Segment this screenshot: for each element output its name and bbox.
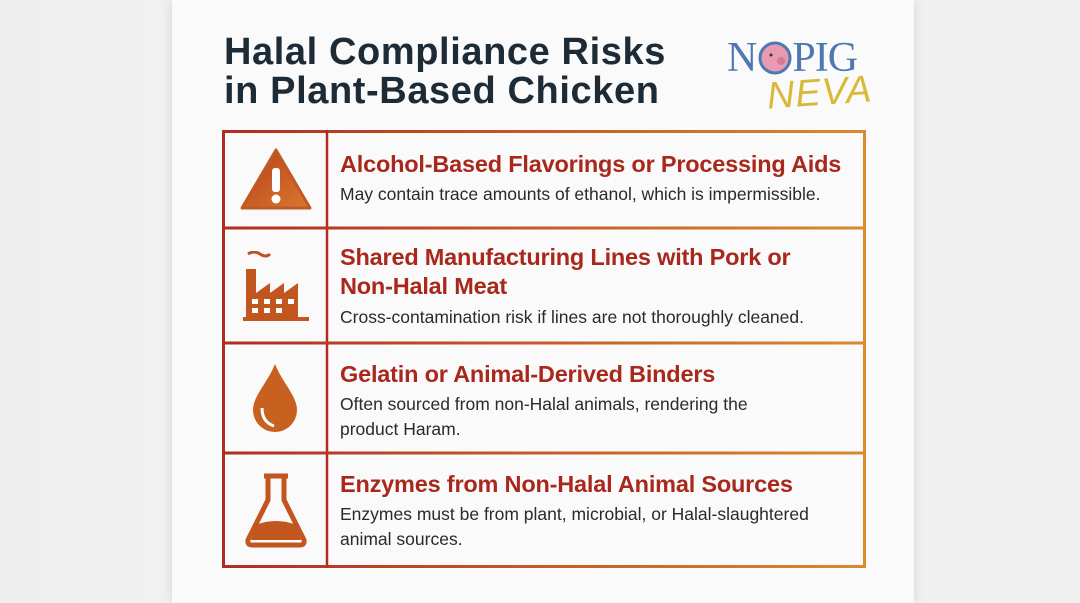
heading 2: Non-Halal Meat (340, 273, 507, 299)
icon: drop (253, 364, 297, 432)
heading 3: Gelatin or Animal-Derived Binders (340, 361, 715, 387)
heading 1: Alcohol-Based Flavorings or Processing Aids (340, 151, 841, 177)
table grid (222, 130, 866, 568)
body 4: Enzymes must be from plant, microbial, or Halal-slaughtered (340, 504, 809, 524)
body 3: Often sourced from non-Halal animals, rendering the (340, 394, 748, 414)
title: Halal Compliance Risks (224, 31, 666, 73)
icon: factory (243, 251, 309, 321)
title (224, 31, 666, 112)
logo: NEVA (766, 68, 874, 118)
body 3 (340, 394, 748, 439)
title: in Plant-Based Chicken (224, 70, 660, 112)
body 2: Cross-contamination risk if lines are not thoroughly cleaned. (340, 307, 804, 327)
heading 2 (340, 244, 791, 299)
heading 4: Enzymes from Non-Halal Animal Sources (340, 471, 793, 497)
icon: flask (245, 474, 307, 548)
body 4: animal sources. (340, 529, 463, 549)
logo: N PIG (727, 35, 857, 81)
body 1: May contain trace amounts of ethanol, which is impermissible. (340, 184, 820, 204)
heading 2: Shared Manufacturing Lines with Pork or (340, 244, 791, 270)
icon: warning (240, 148, 312, 210)
body 3: product Haram. (340, 419, 461, 439)
card (172, 0, 914, 603)
logo (727, 35, 874, 118)
body 4 (340, 504, 809, 549)
